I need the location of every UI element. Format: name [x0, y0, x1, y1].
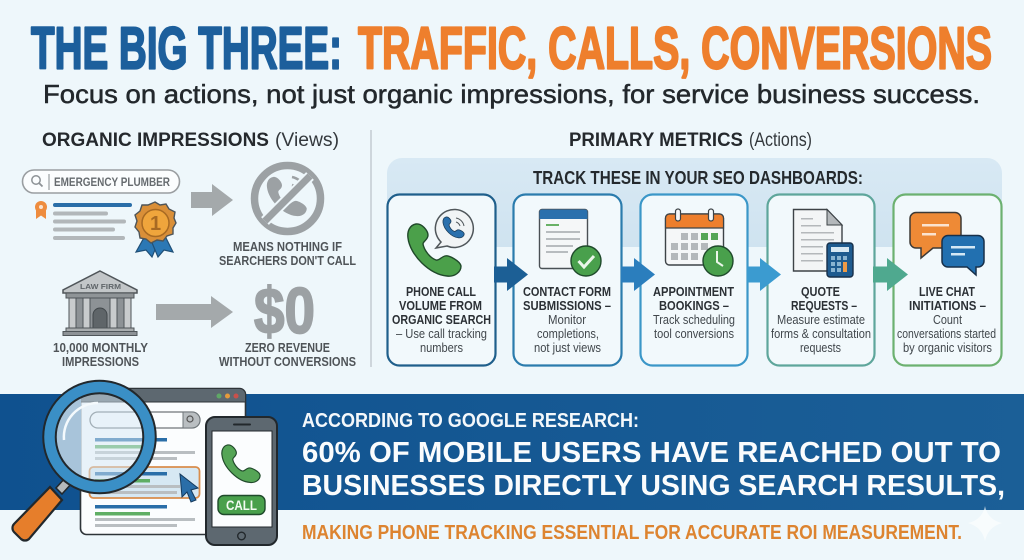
card text: – Use call tracking [396, 327, 487, 341]
arrow: card three to four [747, 258, 781, 291]
card text: APPOINTMENT [653, 284, 734, 299]
arrow: search to no calls [191, 184, 233, 216]
icon: number one medal: 1 [150, 213, 161, 235]
card text: VOLUME FROM [399, 298, 482, 313]
card text [653, 284, 735, 341]
icon: number one medal [135, 202, 176, 257]
card text: forms & consultation [771, 327, 871, 341]
card text: numbers [420, 341, 463, 355]
icon: chat bubbles [910, 212, 984, 275]
card text [771, 284, 871, 355]
icon: form with check [540, 210, 601, 276]
browser window [80, 388, 246, 534]
heading: organic impressions: (Views) [275, 130, 339, 151]
callout: google research statistic: BUSINESSES DIRECTLY USING SEARCH RESULTS, [302, 470, 1005, 502]
icon: law firm building: LAW FIRM [80, 282, 121, 291]
card text: Monitor [548, 313, 586, 327]
search result lines [53, 203, 132, 240]
big zero dollars: $0 [254, 274, 315, 347]
card text: Track scheduling [653, 313, 735, 327]
card: contact form [514, 194, 622, 366]
arrow: card two to three [621, 258, 655, 291]
text: monthly impressions: IMPRESSIONS [62, 354, 139, 369]
callout: google research statistic: ACCORDING TO GOOGLE RESEARCH: [302, 410, 639, 432]
arrow: impressions to zero [156, 296, 233, 328]
card text: Measure estimate [777, 313, 865, 327]
callout: google research statistic: 60% OF MOBILE USERS HAVE REACHED OUT TO [302, 437, 1001, 469]
illustration: browser, phone and magnifier [12, 387, 277, 545]
text: monthly impressions: 10,000 MONTHLY [53, 340, 148, 355]
text: monthly impressions [53, 340, 148, 369]
card text: LIVE CHAT [919, 284, 975, 299]
card text: not just views [534, 341, 601, 355]
title: THE BIG THREE: [31, 16, 342, 82]
card text: tool conversions [654, 327, 734, 341]
card text: BOOKINGS – [659, 298, 729, 313]
card text: conversations started [897, 327, 996, 341]
heading: organic impressions: ORGANIC IMPRESSIONS [42, 130, 269, 151]
search bar: EMERGENCY PLUMBER [54, 175, 170, 189]
icon: crossed-out phone [254, 166, 320, 232]
text: zero revenue: ZERO REVENUE [245, 340, 330, 355]
search bar [22, 170, 180, 193]
heading: primary metrics: PRIMARY METRICS [569, 130, 743, 151]
card: appointment bookings [640, 194, 748, 366]
card text: Count [933, 313, 962, 327]
card text: PHONE CALL [406, 284, 476, 299]
card text: CONTACT FORM [523, 284, 611, 299]
card text [392, 284, 491, 355]
banner band [0, 394, 1024, 510]
subtitle: Focus on actions, not just organic impressions, for service business success. [43, 79, 980, 109]
icon: small orange rosette [35, 201, 47, 219]
text: zero revenue: WITHOUT CONVERSIONS [219, 354, 356, 369]
icon: document with calculator [794, 210, 853, 277]
text: means nothing [219, 239, 356, 268]
card text: SUBMISSIONS – [523, 298, 611, 313]
arrow: card four to five [873, 258, 908, 291]
card text: completions, [537, 327, 599, 341]
icon: law firm building [63, 271, 137, 336]
magnifying glass [12, 387, 150, 541]
card text [897, 284, 996, 355]
card text: ORGANIC SEARCH [392, 312, 491, 327]
smartphone: CALL [226, 497, 257, 513]
card text [523, 284, 611, 355]
card: quote requests [768, 194, 874, 366]
smartphone [206, 417, 277, 545]
icon: sparkle [968, 506, 1002, 541]
arrow: card one to two [494, 258, 528, 291]
heading: track these: TRACK THESE IN YOUR SEO DASHBOARDS: [533, 167, 863, 188]
card text: REQUESTS – [791, 298, 857, 313]
text: means nothing: SEARCHERS DON'T CALL [219, 253, 356, 268]
card: live chat [894, 194, 1002, 366]
card text: by organic visitors [903, 341, 992, 355]
panel: dashboard backdrop [387, 158, 1002, 247]
card text: QUOTE [801, 284, 840, 299]
text: means nothing: MEANS NOTHING IF [233, 239, 342, 254]
icon: calendar with clock [666, 209, 733, 276]
panel: organic impressions [22, 130, 356, 369]
card: phone call volume [388, 194, 496, 366]
title [31, 16, 992, 82]
heading: primary metrics: (Actions) [749, 130, 812, 151]
text: zero revenue [219, 340, 356, 369]
callout: google research statistic [302, 410, 1005, 502]
icon: green phone with bubble [408, 209, 473, 276]
card text: requests [800, 341, 841, 355]
card text: INITIATIONS – [909, 298, 986, 313]
